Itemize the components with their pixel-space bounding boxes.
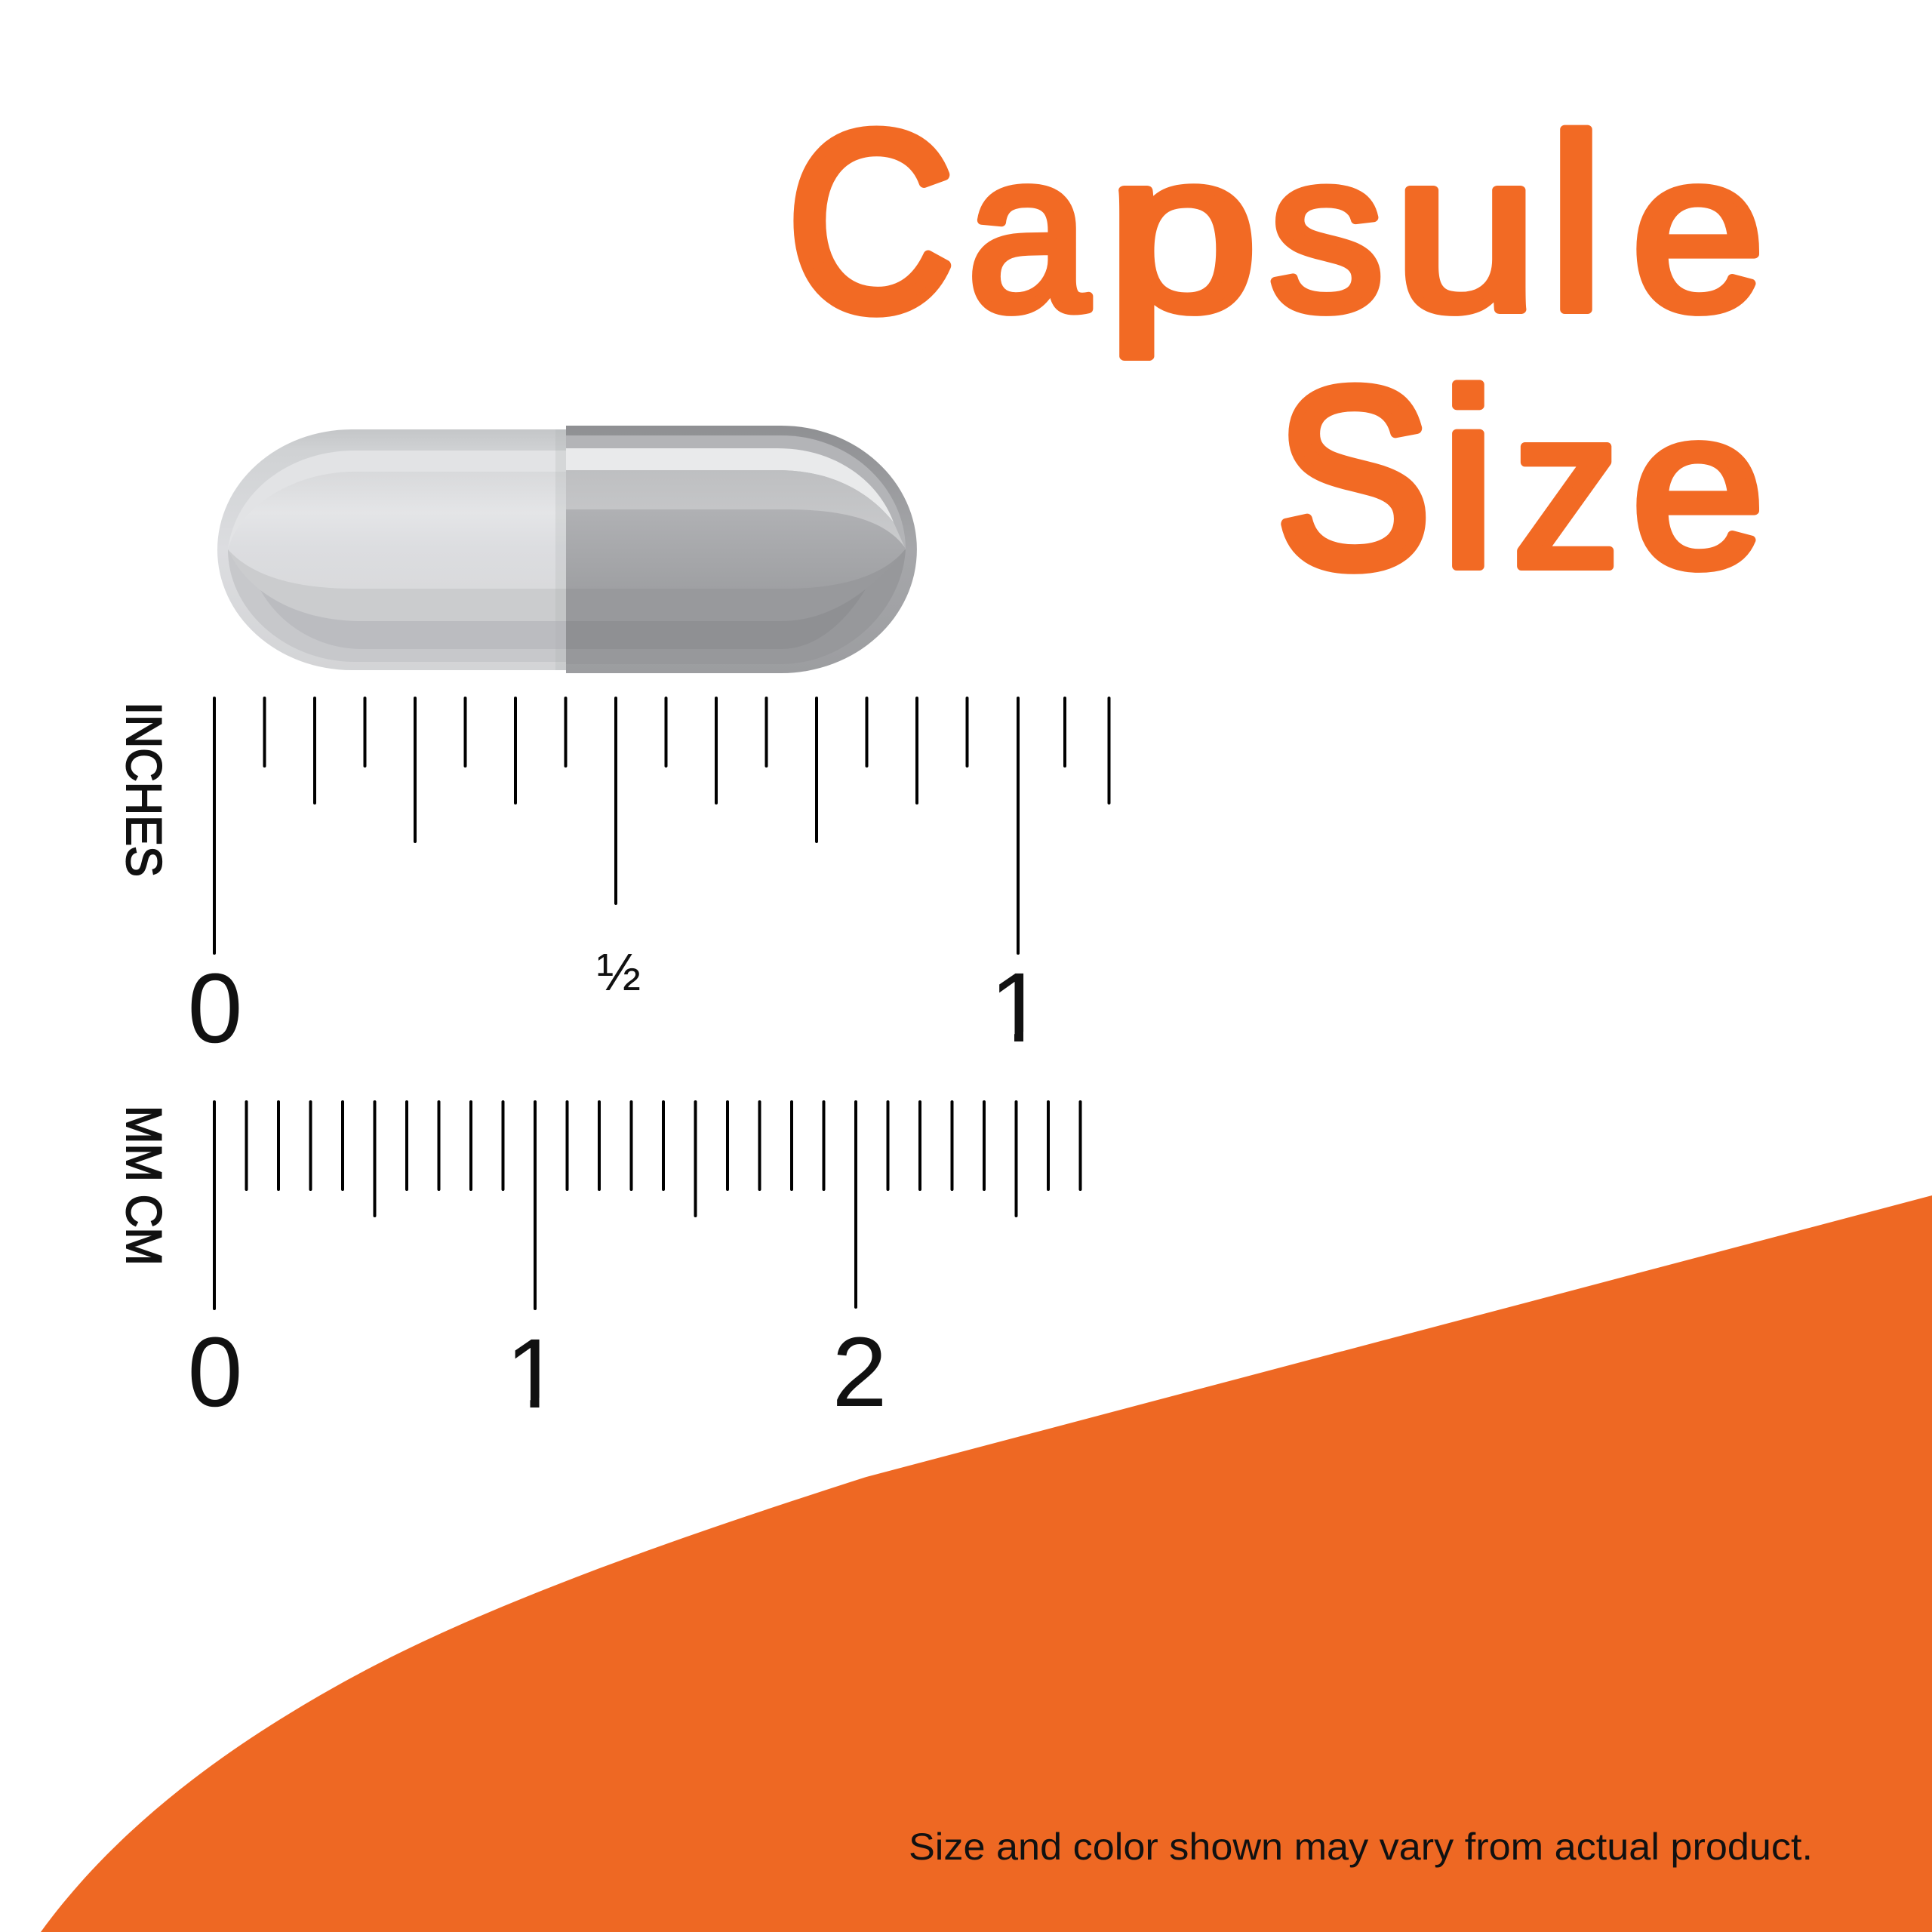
title line: Capsule: C <box>787 78 955 364</box>
inches label: INCHES <box>116 702 172 877</box>
centimetre ruler ticks <box>214 1102 1081 1309</box>
orange curved panel <box>41 1195 1932 1932</box>
title line: Size: z <box>1512 362 1620 614</box>
cm number 0: 0 <box>188 1316 242 1427</box>
cm number 2: 2 <box>832 1316 887 1427</box>
title line: Capsule: l <box>1547 85 1604 362</box>
title line: Size: e <box>1631 362 1765 614</box>
centimetre ruler <box>116 1102 1081 1429</box>
title <box>787 78 1765 620</box>
cm number 1: 1 <box>506 1318 561 1429</box>
title line: Capsule: u <box>1393 106 1538 358</box>
title line: Size: i <box>1439 340 1497 620</box>
footnote: Size and color shown may vary from actual product. <box>909 1826 1813 1868</box>
title line: Capsule: e <box>1631 106 1765 358</box>
title line: Capsule: s <box>1269 106 1384 358</box>
title line: Capsule: a <box>968 106 1090 358</box>
inches number 1: 1 <box>990 952 1044 1063</box>
title line: Size: S <box>1275 335 1432 620</box>
inches number one half: ½ <box>597 943 641 1001</box>
mm cm label: MM CM <box>116 1106 172 1266</box>
inches ruler ticks <box>214 698 1109 953</box>
title line: Capsule: p <box>1106 106 1258 358</box>
capsule: clear left half <box>217 429 566 670</box>
inches number 0: 0 <box>188 952 242 1063</box>
inches ruler <box>116 698 1109 1063</box>
capsule <box>217 426 917 673</box>
capsule: coloured right cap <box>566 426 917 673</box>
